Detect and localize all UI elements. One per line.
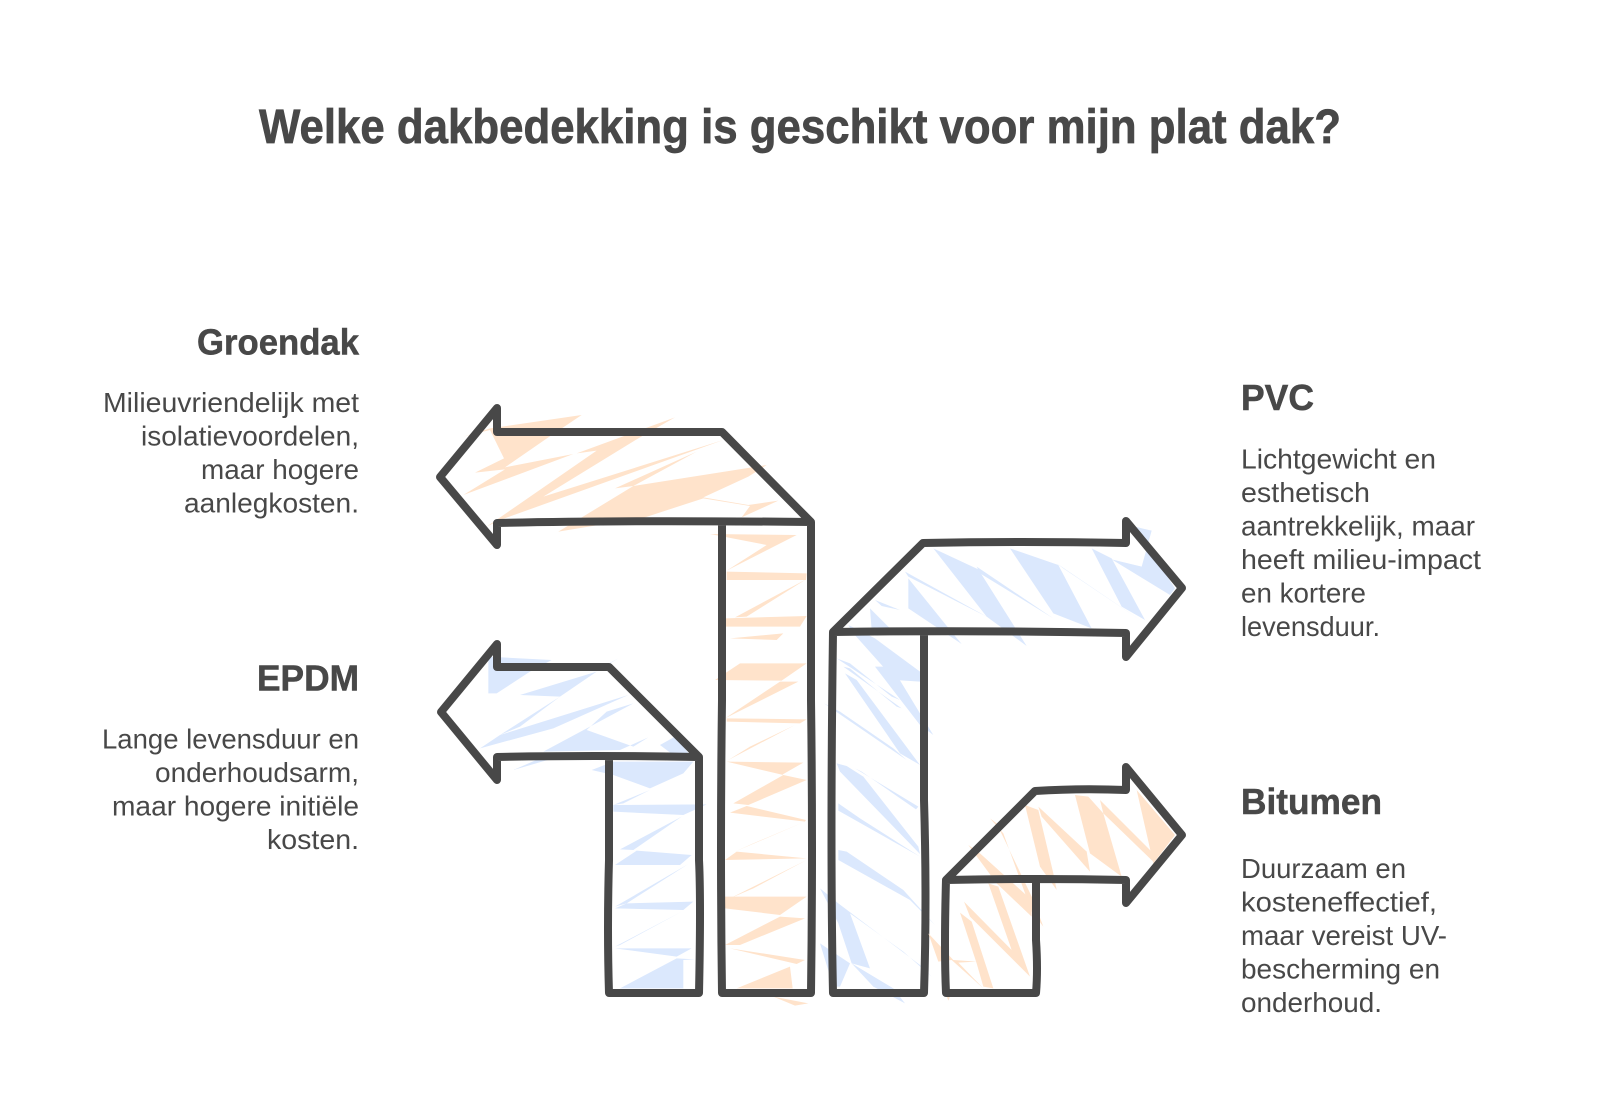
hatch fill: Groendak column bbox=[710, 534, 808, 1006]
panel: Groendak text bbox=[103, 322, 360, 518]
title: Welke dakbedekking is geschikt voor mijn plat dak? bbox=[259, 101, 1341, 154]
arrow: Groendak (orange, left) bbox=[440, 408, 812, 1006]
text block: Bitumen description bbox=[1241, 853, 1447, 1018]
arrow: PVC (blue, right) bbox=[820, 521, 1182, 1003]
hatch fill: Groendak head bbox=[463, 415, 778, 532]
hatch fill: EPDM column bbox=[592, 762, 707, 988]
text block: Bitumen description: onderhoud. bbox=[1241, 987, 1382, 1018]
text block: Groendak description: maar hogere bbox=[201, 454, 359, 485]
text block: EPDM description: maar hogere initiële bbox=[112, 790, 359, 822]
text block: Groendak description: Milieuvriendelijk met bbox=[103, 387, 359, 418]
outline: Groendak arrow bbox=[440, 408, 812, 993]
text block: Bitumen description: Duurzaam en bbox=[1241, 853, 1406, 884]
text block: PVC description: aantrekkelijk, maar bbox=[1241, 510, 1475, 542]
text block: Bitumen description: bescherming en bbox=[1241, 954, 1440, 984]
outline: EPDM arrow bbox=[441, 644, 700, 993]
text block: Groendak description: aanlegkosten. bbox=[184, 488, 359, 518]
outline: Bitumen arrow bbox=[945, 767, 1182, 993]
arrow: Bitumen (orange, right) bbox=[928, 767, 1182, 1001]
hatch fill: EPDM head bbox=[458, 657, 690, 770]
heading: Bitumen: Bitumen bbox=[1241, 781, 1382, 822]
arrow: EPDM (blue, left) bbox=[441, 644, 707, 993]
text block: EPDM description: Lange levensduur en bbox=[102, 724, 359, 754]
heading: PVC: PVC bbox=[1241, 377, 1314, 418]
text block: PVC description: Lichtgewicht en bbox=[1241, 444, 1436, 474]
text block: Bitumen description: kosteneffectief, bbox=[1241, 886, 1437, 918]
text block: Groendak description bbox=[103, 387, 359, 518]
text block: PVC description: heeft milieu-impact bbox=[1241, 544, 1481, 575]
text block: PVC description bbox=[1241, 444, 1481, 642]
text block: PVC description: levensduur. bbox=[1241, 611, 1380, 642]
text block: PVC description: en kortere bbox=[1241, 578, 1366, 608]
text block: Groendak description: isolatievoordelen, bbox=[141, 420, 359, 452]
text block: EPDM description bbox=[102, 724, 359, 855]
text block: EPDM description: onderhoudsarm, bbox=[155, 757, 359, 788]
text block: EPDM description: kosten. bbox=[267, 824, 359, 855]
outline: PVC arrow bbox=[832, 521, 1182, 993]
panel: EPDM text bbox=[102, 658, 359, 855]
hatch fill: PVC head bbox=[870, 527, 1175, 646]
panel: Bitumen text bbox=[1241, 781, 1447, 1018]
panel: PVC text bbox=[1241, 377, 1481, 642]
text block: Bitumen description: maar vereist UV- bbox=[1241, 920, 1447, 951]
heading: EPDM: EPDM bbox=[257, 658, 359, 698]
text block: PVC description: esthetisch bbox=[1241, 477, 1370, 508]
heading: Groendak: Groendak bbox=[197, 322, 360, 362]
hatch fill: Bitumen bbox=[928, 790, 1175, 1001]
hatch fill: PVC column bbox=[837, 625, 920, 700]
